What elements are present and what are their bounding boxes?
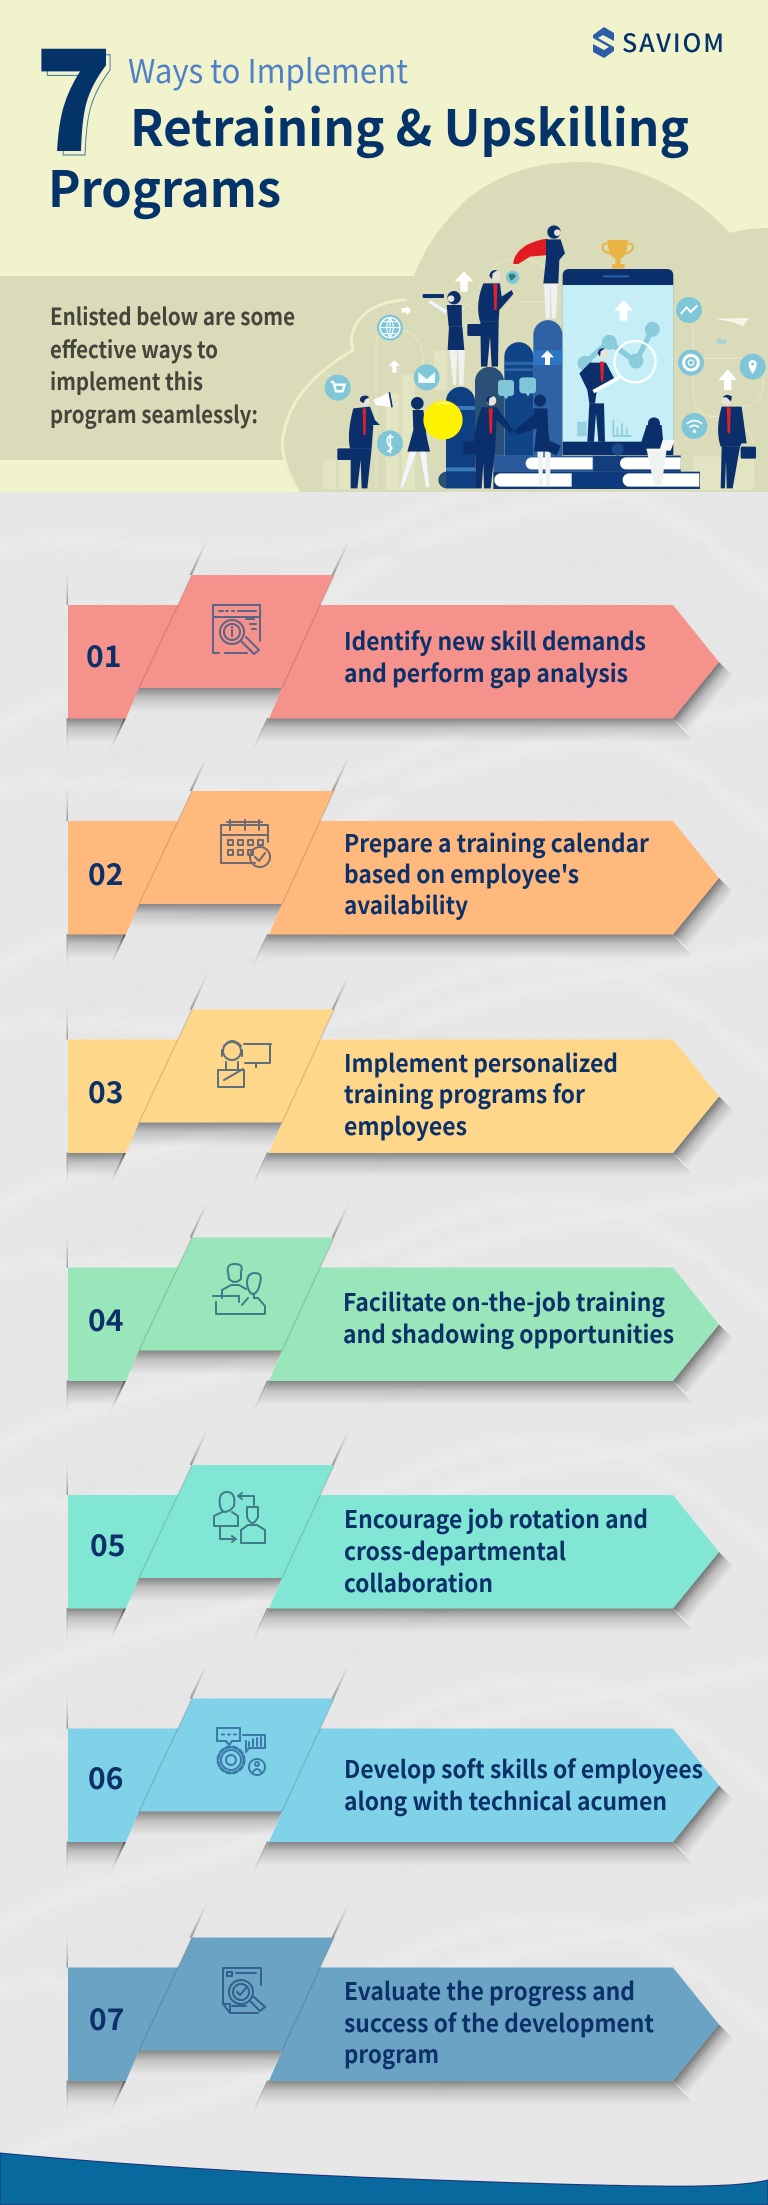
intro text: program seamlessly: <box>50 396 258 430</box>
banner 05 <box>66 1430 738 1640</box>
text 02: based on employee's <box>344 856 579 891</box>
banner 07 <box>66 1902 738 2112</box>
text 03 <box>344 1045 618 1143</box>
banner 06 <box>66 1664 738 1874</box>
text 03: training programs for <box>344 1076 585 1111</box>
number 03: 03 <box>88 1068 123 1112</box>
text 06: Develop soft skills of employees <box>344 1751 703 1786</box>
title: subtitle: Ways to Implement <box>128 45 408 93</box>
text 01: Identify new skill demands <box>344 623 646 658</box>
header background <box>0 0 768 492</box>
trophy <box>603 240 633 269</box>
intro text <box>50 298 295 430</box>
text 05 <box>344 1501 648 1600</box>
white arrows <box>389 271 749 390</box>
text 04: and shadowing opportunities <box>343 1316 674 1351</box>
number 01: 01 <box>86 632 121 676</box>
banner 02 <box>66 756 738 966</box>
person: megaphone man <box>337 392 392 488</box>
banner 01 <box>66 540 738 750</box>
person: woman with bulb <box>400 397 463 487</box>
text 02: Prepare a training calendar <box>344 825 649 860</box>
number 05: 05 <box>90 1521 125 1565</box>
person: right man <box>718 395 756 488</box>
icon: browser with magnifier <box>213 605 260 654</box>
cloud highlight outline <box>283 300 407 492</box>
intro text: effective ways to <box>50 331 218 365</box>
text 02 <box>344 825 649 922</box>
text 02: availability <box>344 887 468 922</box>
circuit lines <box>317 258 764 490</box>
person: woman with telescope <box>423 291 465 385</box>
text 07: program <box>344 2036 439 2071</box>
faint background bars <box>323 350 753 490</box>
text 03: employees <box>344 1108 467 1143</box>
number 06: 06 <box>88 1754 123 1798</box>
phone chart <box>577 322 660 436</box>
illustration: business team climbing <box>317 225 766 490</box>
number 02: 02 <box>88 850 123 894</box>
intro text: implement this <box>50 363 203 397</box>
text 05: cross-departmental <box>344 1533 566 1568</box>
phone <box>563 269 673 455</box>
person: woman with red cape <box>513 225 565 318</box>
text 07: Evaluate the progress and <box>344 1973 635 2008</box>
speech bubbles <box>498 380 514 399</box>
phone arrow <box>614 300 633 321</box>
intro text: Enlisted below are some <box>50 298 295 332</box>
title: main heading: Programs <box>48 150 281 222</box>
icon: job rotation people <box>214 1492 265 1543</box>
person: woman with laptop <box>639 417 675 485</box>
number 07: 07 <box>89 1995 124 2039</box>
person: man with globe <box>467 270 519 367</box>
text 04: Facilitate on-the-job training <box>343 1284 665 1319</box>
base blob and books <box>438 472 480 488</box>
person: handshake man <box>463 396 513 488</box>
text 01 <box>344 623 646 690</box>
person: handshake woman <box>514 395 561 487</box>
text 05: collaboration <box>344 1565 493 1600</box>
icon: trainer with board <box>218 1041 271 1087</box>
background wave texture <box>0 460 768 2205</box>
text 07 <box>344 1973 654 2071</box>
hill cloud behind illustration <box>283 162 768 492</box>
banner 04 <box>66 1202 738 1412</box>
text 05: Encourage job rotation and <box>344 1501 648 1536</box>
text 03: Implement personalized <box>344 1045 618 1080</box>
text 04 <box>343 1284 674 1351</box>
banner 03 <box>66 974 738 1184</box>
person: man with magnifier <box>579 341 656 442</box>
title: main heading <box>48 89 689 222</box>
text 07: success of the development <box>344 2005 654 2040</box>
title: main heading: Retraining & Upskilling <box>130 89 689 161</box>
logo: Saviom: SAVIOM <box>622 24 724 60</box>
footer wave <box>0 2153 768 2205</box>
intro band <box>0 276 420 460</box>
text 01: and perform gap analysis <box>344 655 628 690</box>
icon circles <box>325 297 766 456</box>
text 06: along with technical acumen <box>344 1783 667 1818</box>
text 06 <box>344 1751 703 1818</box>
number 04: 04 <box>88 1296 123 1340</box>
icon: calendar <box>221 820 270 867</box>
towers <box>446 387 475 488</box>
title: numeral 7: 7 <box>41 0 116 195</box>
icon: two people at desk <box>213 1264 265 1314</box>
icon: gear with chat <box>217 1728 265 1775</box>
icon: document with magnifier <box>223 1968 265 2013</box>
